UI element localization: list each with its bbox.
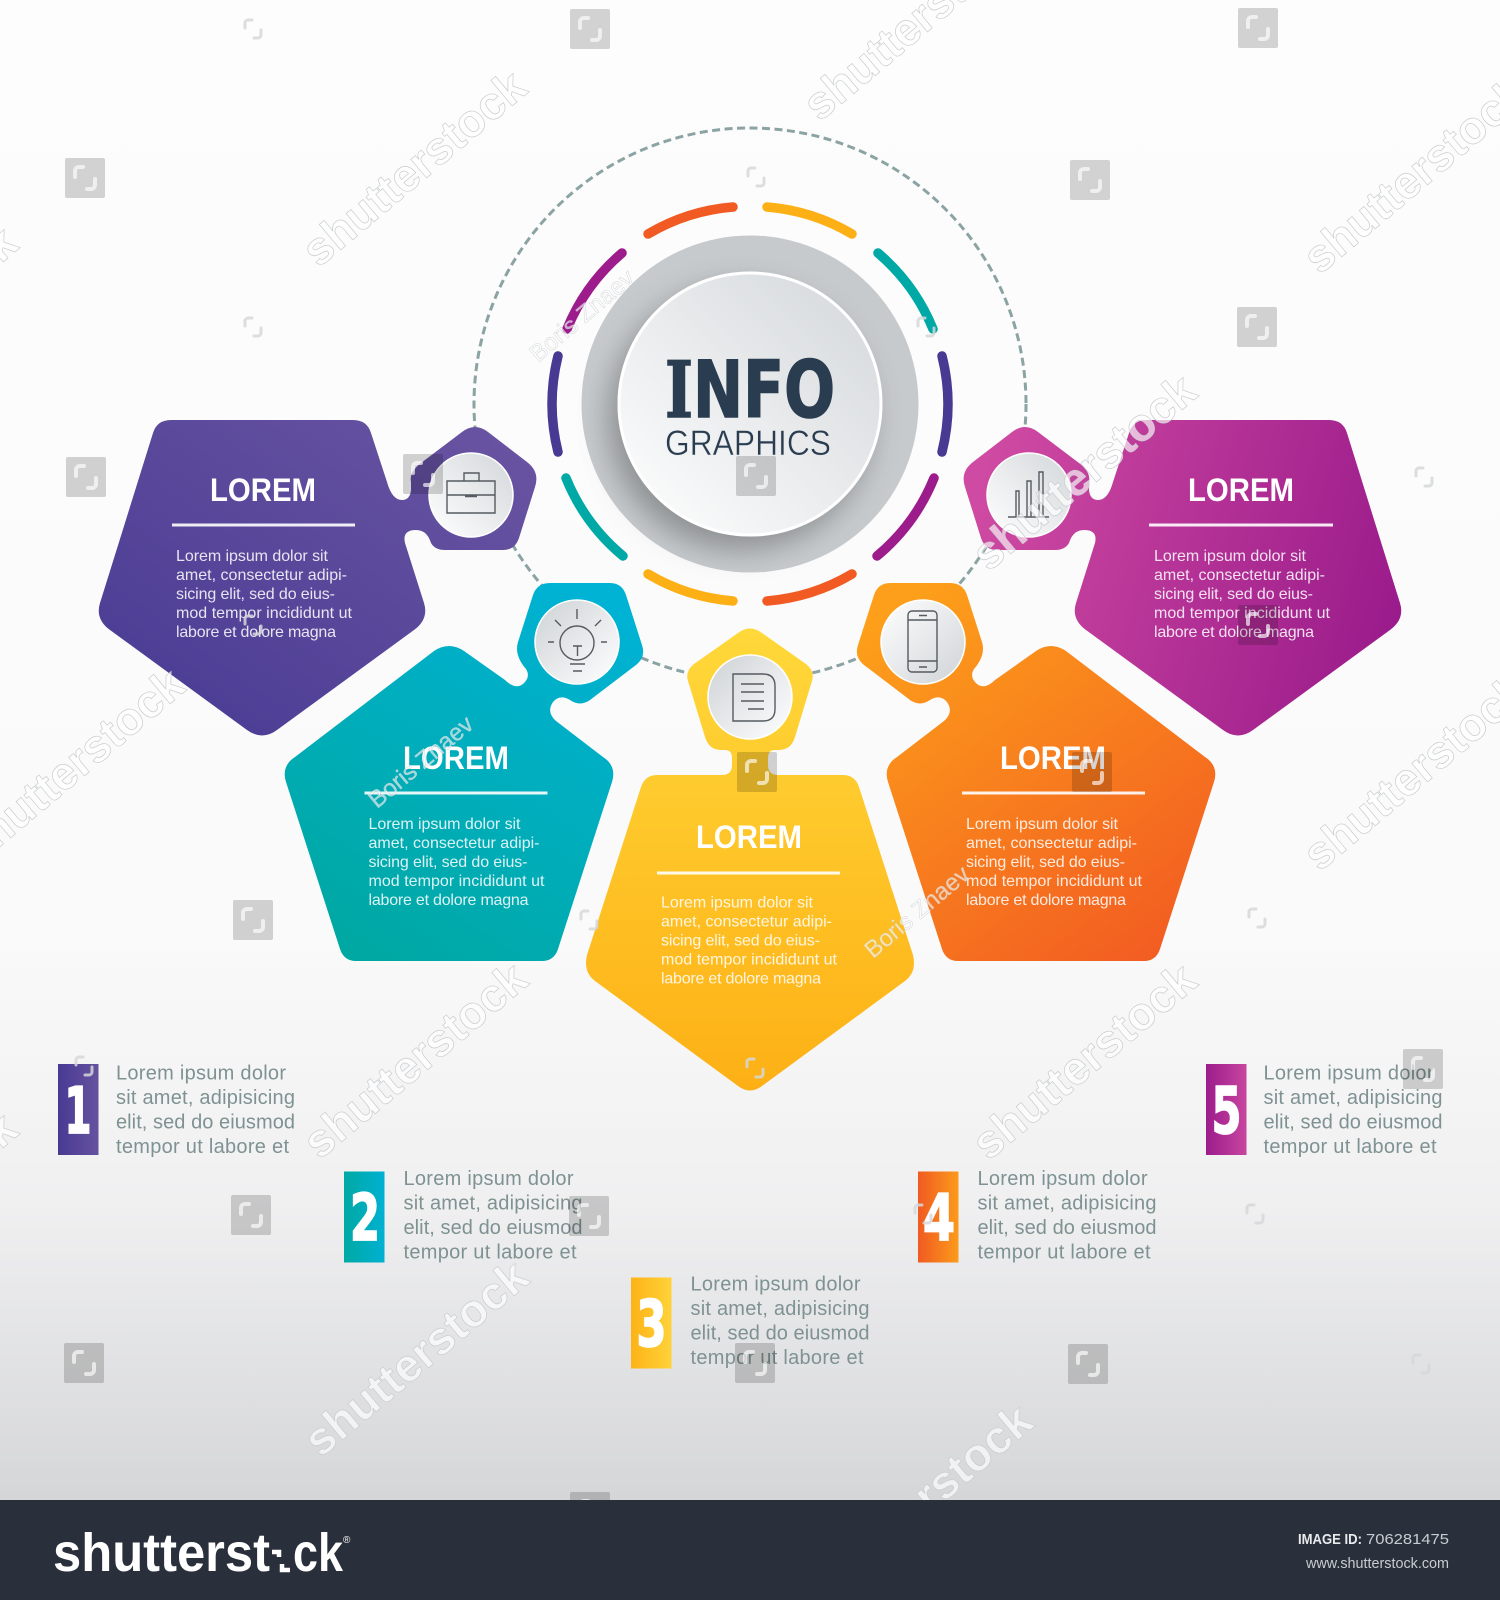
- legend item 5: Lorem ipsum dolor: [1264, 1062, 1434, 1084]
- legend item 2: sit amet, adipisicing: [404, 1192, 582, 1214]
- legend item 2: Lorem ipsum dolor: [404, 1168, 574, 1190]
- badge title: INFO: INFO: [665, 345, 835, 436]
- legend item 4: elit, sed do eiusmod: [978, 1217, 1156, 1239]
- legend item 1: sit amet, adipisicing: [116, 1087, 295, 1109]
- image id: IMAGE ID:: [1298, 1531, 1362, 1548]
- icon: bar chart: [987, 453, 1071, 537]
- body text: mod tempor incididunt ut: [368, 873, 545, 890]
- body text: labore et dolore magna: [966, 892, 1126, 909]
- divider: [172, 524, 355, 526]
- divider: [962, 792, 1145, 794]
- legend item 1: elit, sed do eiusmod: [116, 1112, 295, 1134]
- image id: www.shutterstock.com: [1305, 1555, 1449, 1572]
- body text: [661, 894, 838, 988]
- legend item 3: tempor ut labore et: [690, 1347, 864, 1369]
- body text: labore et dolore magna: [1154, 624, 1314, 641]
- icon: light bulb: [535, 600, 619, 684]
- watermark overlay: shutterstock: [292, 59, 536, 276]
- icon: briefcase: [429, 453, 513, 537]
- body text: Lorem ipsum dolor sit: [661, 894, 814, 912]
- legend item 1: 1: [64, 1075, 92, 1149]
- body text: Lorem ipsum dolor sit: [966, 816, 1119, 833]
- legend item 5: tempor ut labore et: [1264, 1136, 1437, 1158]
- watermark overlay: Boris Znaev: [859, 861, 975, 964]
- heading: LOREM: [210, 472, 316, 508]
- body text: Lorem ipsum dolor sit: [176, 548, 329, 565]
- legend item 3: Lorem ipsum dolor: [690, 1274, 861, 1296]
- body text: Lorem ipsum dolor sit: [1154, 548, 1307, 565]
- body text: amet, consectetur adipi-: [368, 835, 540, 852]
- legend item 4: tempor ut labore et: [978, 1242, 1151, 1264]
- legend item 3: elit, sed do eiusmod: [690, 1322, 870, 1344]
- body text: amet, consectetur adipi-: [176, 567, 347, 584]
- body text: [1154, 548, 1331, 641]
- legend item 2: 2: [350, 1182, 380, 1256]
- legend item 5: elit, sed do eiusmod: [1264, 1112, 1442, 1134]
- body text: [368, 816, 545, 909]
- legend item 1: tempor ut labore et: [116, 1136, 289, 1158]
- panel: orange step: [857, 583, 1215, 961]
- heading: LOREM: [696, 819, 802, 855]
- dashed orbit ring: [474, 128, 1026, 680]
- panel: purple step: [99, 420, 536, 736]
- body text: mod tempor incididunt ut: [176, 605, 353, 622]
- body text: amet, consectetur adipi-: [661, 914, 832, 930]
- body text: [176, 548, 353, 641]
- divider: [657, 872, 840, 874]
- watermark overlay: shutterstock: [962, 952, 1206, 1169]
- legend item 4: sit amet, adipisicing: [978, 1192, 1156, 1214]
- heading: LOREM: [403, 740, 509, 776]
- body text: mod tempor incididunt ut: [661, 952, 838, 968]
- legend item 2: elit, sed do eiusmod: [404, 1217, 582, 1239]
- body text: sicing elit, sed do eius-: [966, 854, 1125, 871]
- legend item 3: 3: [636, 1288, 666, 1362]
- legend item 2: [344, 1168, 582, 1264]
- body text: sicing elit, sed do eius-: [1154, 586, 1313, 603]
- body text: labore et dolore magna: [368, 892, 529, 909]
- legend item 4: [918, 1168, 1156, 1264]
- legend item 1: Lorem ipsum dolor: [116, 1062, 286, 1084]
- panel: yellow step: [586, 628, 914, 1090]
- watermark overlay: Boris Znaev: [363, 711, 479, 814]
- divider: [1149, 524, 1333, 526]
- heading: LOREM: [1188, 472, 1294, 508]
- image id: 706281475: [1366, 1531, 1449, 1548]
- icon: document: [708, 655, 792, 739]
- footer logo: shutterst: [53, 1523, 270, 1583]
- watermark overlay: shutterstock: [294, 1249, 538, 1466]
- legend item 2: tempor ut labore et: [404, 1242, 577, 1264]
- panel: teal step: [285, 583, 643, 961]
- watermark overlay: Boris Znaev: [524, 265, 640, 368]
- body text: amet, consectetur adipi-: [966, 835, 1137, 852]
- badge subtitle: GRAPHICS: GRAPHICS: [665, 424, 831, 463]
- colored arc ring: [552, 207, 948, 601]
- legend item 5: [1206, 1062, 1442, 1158]
- body text: [966, 816, 1143, 909]
- body text: labore et dolore magna: [176, 624, 336, 641]
- body text: mod tempor incididunt ut: [966, 873, 1143, 890]
- legend item 3: sit amet, adipisicing: [690, 1298, 870, 1320]
- legend item 4: Lorem ipsum dolor: [978, 1168, 1148, 1190]
- body text: sicing elit, sed do eius-: [176, 586, 335, 603]
- body text: sicing elit, sed do eius-: [368, 854, 528, 871]
- body text: amet, consectetur adipi-: [1154, 567, 1325, 584]
- watermark overlay: shutterstock: [293, 951, 537, 1168]
- icon: smartphone: [881, 600, 965, 684]
- footer bar: [0, 1500, 1500, 1600]
- body text: mod tempor incididunt ut: [1154, 605, 1331, 622]
- body text: sicing elit, sed do eius-: [661, 932, 820, 950]
- footer logo: ®: [343, 1535, 351, 1546]
- legend item 5: 5: [1212, 1075, 1242, 1149]
- panel: magenta step: [964, 420, 1401, 736]
- body text: Lorem ipsum dolor sit: [368, 816, 521, 833]
- legend item 4: 4: [923, 1182, 955, 1256]
- legend item 1: [58, 1062, 295, 1158]
- footer logo: ck: [293, 1523, 344, 1583]
- watermark overlay: shutterstock: [962, 363, 1206, 580]
- central badge: [582, 236, 918, 572]
- body text: labore et dolore magna: [661, 970, 821, 988]
- image id: [1298, 1531, 1449, 1572]
- divider: [364, 792, 548, 794]
- legend item 5: sit amet, adipisicing: [1264, 1087, 1442, 1109]
- legend item 3: [631, 1274, 870, 1369]
- heading: LOREM: [1000, 740, 1106, 776]
